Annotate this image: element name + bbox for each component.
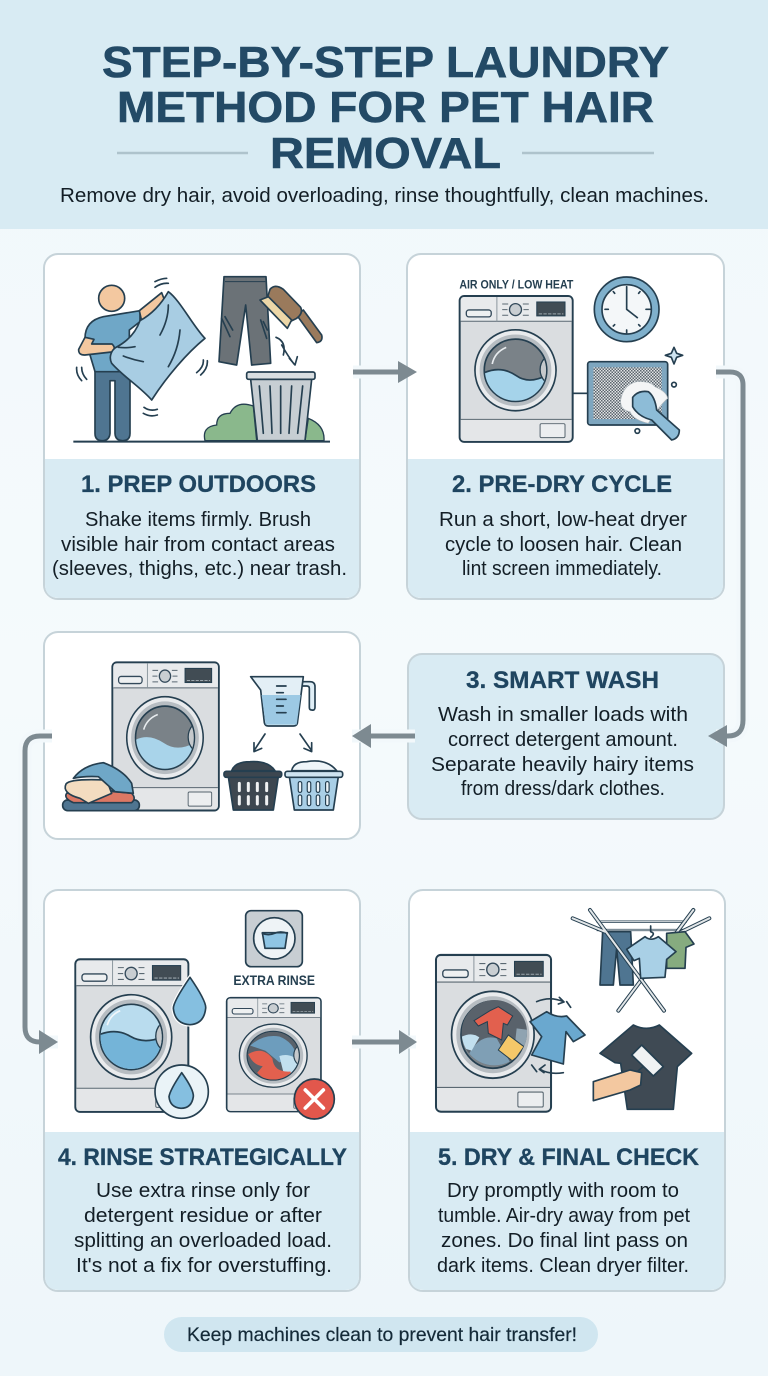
step 3 text: from dress/dark clothes. xyxy=(461,777,665,800)
title: METHOD FOR PET HAIR xyxy=(117,83,654,132)
panel: step 5 dry and final check xyxy=(409,890,725,1291)
step 5 text: zones. Do final lint pass on xyxy=(441,1229,688,1252)
arrow: step 4 to step 5 xyxy=(352,1030,417,1054)
step 4 text: splitting an overloaded load. xyxy=(74,1229,332,1252)
arrow: step 1 to step 2 xyxy=(353,361,417,383)
step 5 text: tumble. Air-dry away from pet xyxy=(438,1204,690,1227)
step 1 heading: 1. PREP OUTDOORS xyxy=(81,471,316,498)
illustration: washer, laundry pile, measuring jug, sorted baskets xyxy=(63,662,343,811)
step 4 text: detergent residue or after xyxy=(84,1204,322,1227)
step 1 text: Shake items firmly. Brush xyxy=(85,508,311,531)
illustration: washers, extra rinse symbol, water drops: EXTRA RINSE xyxy=(233,972,315,988)
step 4 text: Use extra rinse only for xyxy=(96,1179,310,1202)
arrow: step 2 to step 3 xyxy=(708,372,743,747)
step 1 text xyxy=(52,508,347,580)
step 5 text: Dry promptly with room to xyxy=(447,1179,679,1202)
footer callout xyxy=(164,1317,598,1352)
panel: step 1 prep outdoors xyxy=(44,254,360,599)
step 5 heading: 5. DRY & FINAL CHECK xyxy=(438,1144,700,1171)
panel: step 4 rinse strategically xyxy=(44,890,360,1291)
illustration: washers, extra rinse symbol, water drops xyxy=(75,911,334,1119)
subtitle: Remove dry hair, avoid overloading, rinse thoughtfully, clean machines. xyxy=(60,184,709,207)
title: REMOVAL xyxy=(270,129,501,178)
footer callout: Keep machines clean to prevent hair transfer! xyxy=(187,1324,577,1346)
step 1 text: (sleeves, thighs, etc.) near trash. xyxy=(52,557,347,580)
step 4 text xyxy=(74,1179,332,1277)
illustration: dryer, clock, lint screen xyxy=(459,277,683,442)
panel: step 3 illustration xyxy=(44,632,360,839)
arrow: illustration to step 4 xyxy=(25,736,58,1054)
step 3 text: Separate heavily hairy items xyxy=(431,753,694,776)
step 4 text: It's not a fix for overstuffing. xyxy=(76,1254,332,1277)
header band xyxy=(0,0,768,229)
step 4 heading: 4. RINSE STRATEGICALLY xyxy=(58,1144,347,1171)
step 5 text: dark items. Clean dryer filter. xyxy=(437,1254,689,1277)
step 3 text: correct detergent amount. xyxy=(448,728,678,751)
step 5 text xyxy=(437,1179,690,1277)
step 2 text xyxy=(439,508,687,580)
illustration: dryer, drying rack, lint roller on dark shirt xyxy=(436,910,709,1112)
step 2 heading: 2. PRE-DRY CYCLE xyxy=(452,471,672,498)
illustration: shaking cloth, brushing trousers over bin xyxy=(73,277,330,442)
step 2 text: cycle to loosen hair. Clean xyxy=(445,533,682,556)
illustration: dryer, clock, lint screen: AIR ONLY / LOW HEAT xyxy=(459,277,574,291)
step 2 text: Run a short, low-heat dryer xyxy=(439,508,687,531)
step 3 text xyxy=(431,703,694,800)
arrow: step 3 to illustration xyxy=(352,724,415,748)
panel: step 2 pre-dry cycle xyxy=(407,254,724,599)
title xyxy=(102,38,669,178)
step 3 heading: 3. SMART WASH xyxy=(466,667,659,694)
title: STEP-BY-STEP LAUNDRY xyxy=(102,38,669,87)
step 2 text: lint screen immediately. xyxy=(462,557,662,580)
step 3 text: Wash in smaller loads with xyxy=(438,703,688,726)
panel: step 3 smart wash xyxy=(408,654,724,819)
step 1 text: visible hair from contact areas xyxy=(61,533,335,556)
